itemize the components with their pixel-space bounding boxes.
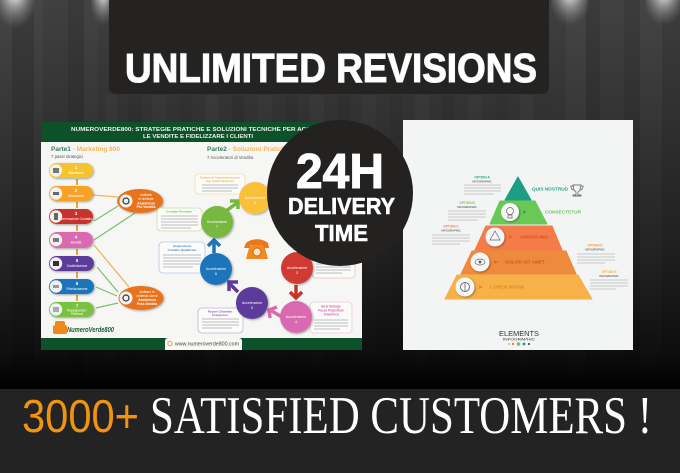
accelerator 5: 5: [251, 306, 253, 310]
tier: green: [490, 201, 547, 224]
panel: pyramid infographic: [403, 120, 633, 350]
panel: marketing infographic: [41, 122, 362, 350]
accelerator 1: [239, 182, 271, 214]
icon: brain: [456, 278, 474, 296]
tier labels: LOREM IPSUM: [490, 284, 524, 290]
accelerator 4: [280, 301, 312, 333]
accelerator 6: [200, 253, 232, 285]
step 2: Attivazione: [68, 194, 84, 198]
logo: numeroverde800: [53, 321, 114, 334]
accelerator 1: 1: [254, 201, 256, 205]
part 1 heading: [51, 146, 120, 159]
elements infographic logo: ELEMENTS: [499, 331, 539, 338]
option C: INFOGRAPHIC: [441, 228, 461, 232]
step 2: 2: [75, 188, 78, 193]
ellipse: pre-sales assistance: [117, 189, 163, 213]
arrow: purple to blue: [229, 282, 238, 292]
callout: pink: [310, 302, 352, 333]
option A: OPTION A: [474, 176, 490, 180]
step 7: Passaparola /: [67, 308, 87, 312]
accelerator 5: [236, 287, 268, 319]
callout: pink: Paese Registrare: [318, 308, 344, 312]
heading: 3000+: 3000+: [22, 390, 139, 442]
step 6: Fidelizzazione: [67, 287, 88, 291]
tier labels: QUIS NOSTRUD: [532, 186, 568, 192]
bottom band: [0, 387, 680, 473]
callout boxes: [157, 174, 355, 333]
step 3: Generazione Contatto: [60, 217, 92, 221]
accelerator 5: Acceleratore: [242, 301, 262, 305]
ellipse: post-sales assistance: Post-Vendita: [137, 302, 157, 306]
callout: blue: Contatto Qualificato: [168, 248, 196, 252]
callout: blue: [159, 242, 205, 273]
pyramid: [445, 177, 592, 299]
callout: red: [312, 255, 355, 278]
icon: trophy: [571, 185, 583, 196]
accelerator 6: 6: [215, 272, 217, 276]
callout: pink: Telefonica: [323, 312, 339, 316]
accelerator 7: 7: [216, 225, 218, 229]
option B: INFOGRAPHIC: [457, 205, 477, 209]
callout: yellow: dei canali telefonici: [206, 179, 234, 183]
option D: OPTION D: [587, 244, 603, 248]
step 7: Referral: [71, 312, 83, 316]
ellipse: post-sales assistance: richieste clienti: [137, 294, 158, 298]
step 1: 1: [75, 165, 78, 170]
tier: yellow: [445, 275, 592, 299]
option A: [464, 176, 501, 194]
ellipse: pre-sales assistance: Pre-Vendita: [137, 205, 155, 209]
ellipse: pre-sales assistance: le richieste: [138, 197, 154, 201]
step 4: [49, 232, 93, 248]
icon: warning: [486, 228, 504, 246]
part 2 heading: 7 Acceleratori di Vendita: [207, 155, 254, 160]
option E: OPTION E: [601, 270, 617, 274]
icon: orange telephone: [244, 239, 269, 259]
tier: orange: [475, 226, 562, 250]
badge: 24h delivery time: 24H: [296, 145, 384, 199]
pyramid icons: [456, 203, 519, 296]
accelerator 6: Acceleratore: [206, 267, 226, 271]
icon: bulb: [501, 203, 519, 221]
elements infographic logo: [499, 331, 539, 346]
pill steps: [49, 163, 94, 317]
accelerator 3: [281, 252, 313, 284]
part 1 heading: 7 passi strategici: [51, 154, 83, 159]
ellipse: pre-sales assistance: Inoltrare: [140, 193, 152, 197]
callout: purple: In Ingresso: [212, 313, 228, 317]
ellipse: post-sales assistance: [118, 286, 164, 310]
accelerator 4: 4: [295, 320, 297, 324]
panel footer: [41, 338, 362, 350]
badge: 24h delivery time: TIME: [315, 220, 368, 246]
ellipse: post-sales assistance: Inoltrare le: [139, 290, 155, 294]
callout: green: Contatto Premium: [166, 210, 192, 214]
tier: teal: [505, 177, 531, 200]
logo: numeroverde800: NumeroVerde800: [67, 327, 114, 334]
panel header: [41, 122, 362, 142]
badge: 24h delivery time: DELIVERY: [288, 193, 395, 219]
callout: yellow: Sistemi di Automatizzazione: [200, 176, 240, 180]
step 7: 7: [76, 304, 79, 308]
step 6: 6: [76, 281, 79, 286]
step 3: [49, 209, 93, 224]
arrow: pink to purple: [269, 307, 282, 318]
ellipse: pre-sales assistance: Assistenza: [137, 202, 155, 206]
step 1: [49, 163, 93, 178]
heading: unlimited revisions: UNLIMITED REVISIONS: [125, 45, 537, 91]
callout: purple: [198, 308, 243, 333]
spotlights: [0, 0, 680, 42]
tier labels: ADIPISCING: [520, 234, 549, 240]
option B: [448, 201, 486, 220]
accelerator 1: Acceleratore: [245, 196, 265, 200]
tier labels: CONSECTETUR: [545, 210, 582, 214]
option C: [432, 224, 470, 244]
arrow: red to pink: [290, 285, 302, 298]
option E: INFOGRAPHIC: [599, 274, 619, 278]
step 4: 4: [75, 234, 78, 240]
panel header: NUMEROVERDE800: STRATEGIE PRATICHE E SOLUZIONI TECNICHE PER ACCELERARE: [71, 127, 342, 133]
connector lines: [77, 179, 135, 308]
callout: pink: Best Dialogo: [321, 304, 341, 308]
callout: green: [157, 208, 202, 231]
panel header: LE VENDITE E FIDELIZZARE I CLIENTI: [143, 134, 254, 140]
option D: [577, 244, 615, 263]
step 3: 3: [75, 211, 78, 216]
option E: [590, 270, 628, 289]
tier labels: [490, 186, 582, 290]
accelerator 7: Acceleratore: [207, 220, 227, 224]
arrow: green to yellow: [226, 201, 238, 211]
step 2: [49, 186, 93, 201]
accelerator 3: Acceleratore: [287, 266, 307, 270]
badge: 24h delivery time: [267, 120, 413, 266]
part 2 heading: [207, 146, 289, 160]
step 6: [49, 279, 94, 294]
part 1 heading: Parte1 - Marketing 800: [51, 146, 120, 153]
tier: dark orange: [461, 251, 576, 274]
icon: eye: [470, 252, 490, 272]
small markers: [479, 210, 527, 289]
ellipse: post-sales assistance: Assistenza: [138, 298, 156, 302]
accelerator 4: Acceleratore: [286, 315, 306, 319]
top banner: [109, 0, 549, 94]
callout: yellow: [195, 174, 245, 194]
option text blocks: [432, 176, 628, 289]
callout: purple: Report Chiamate: [208, 310, 232, 314]
step 5: Soddisfazione: [67, 264, 88, 268]
tier labels: DOLOR SIT AMET: [505, 260, 545, 264]
step 5: [49, 256, 94, 271]
accelerator arrows: [208, 201, 302, 318]
step 5: 5: [76, 258, 79, 263]
step 7: [49, 302, 94, 317]
option A: INFOGRAPHIC: [472, 180, 492, 184]
arrow: blue to green: [208, 240, 220, 253]
step 4: Identità: [71, 240, 82, 244]
option B: OPTION B: [459, 201, 475, 205]
option C: OPTION C: [443, 224, 459, 228]
callout: blue: Acquisizione: [173, 244, 192, 248]
accelerator circles: [200, 182, 313, 333]
option D: INFOGRAPHIC: [585, 248, 605, 252]
panel footer: www.numeroverde800.com: [174, 342, 239, 348]
accelerator 3: 3: [296, 271, 298, 275]
part 2 heading: Parte2 - Soluzioni Pratiche: [207, 146, 289, 153]
elements infographic logo: INFOGRAPHIC: [503, 336, 535, 342]
accelerator 7: [201, 206, 233, 238]
step 1: Attenzione: [68, 171, 84, 175]
